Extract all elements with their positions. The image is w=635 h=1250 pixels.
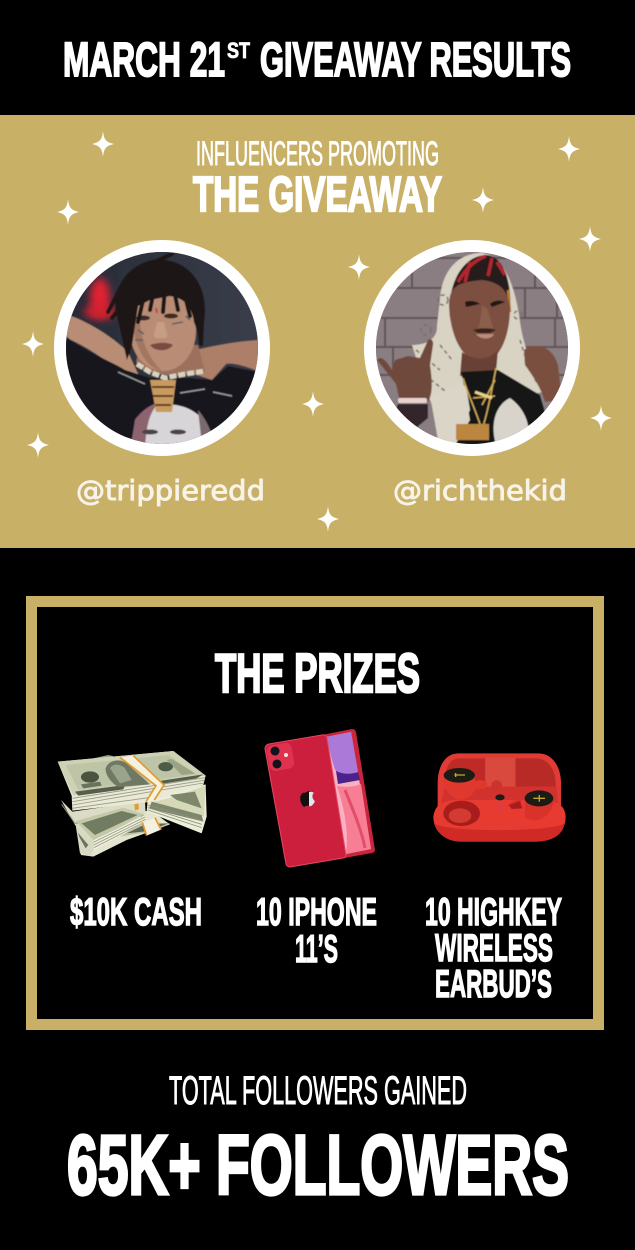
heading: the giveaway: THE GIVEAWAY <box>193 168 442 222</box>
heading: the prizes: THE PRIZES <box>215 642 420 704</box>
panel: the prizes <box>32 602 598 1024</box>
title: ST <box>227 38 250 63</box>
panel: influencers <box>0 115 635 548</box>
photo: trippie redd <box>54 240 270 456</box>
prize label: iphones: 10 IPHONE <box>256 891 377 934</box>
prize label: iphones <box>256 891 377 971</box>
photo: rich the kid <box>364 240 580 456</box>
title <box>63 34 571 87</box>
handle: richthekid: @richthekid <box>393 474 567 507</box>
front phone body <box>265 735 346 867</box>
prize label: earbuds: WIRELESS <box>435 927 553 970</box>
prize label: earbuds <box>425 891 562 1006</box>
prize label: iphones: 11’S <box>295 928 338 971</box>
title: MARCH 21 <box>63 34 225 87</box>
sparkles <box>22 131 612 532</box>
prize label: earbuds: EARBUD’S <box>435 963 552 1006</box>
icon: red iphone 11 <box>265 729 375 867</box>
handle: trippieredd: @trippieredd <box>76 474 265 507</box>
icon: cash stacks <box>58 751 207 857</box>
prize label: cash: $10K CASH <box>70 891 202 934</box>
back phone body <box>322 729 375 858</box>
icon: red wireless earbuds <box>433 753 566 842</box>
